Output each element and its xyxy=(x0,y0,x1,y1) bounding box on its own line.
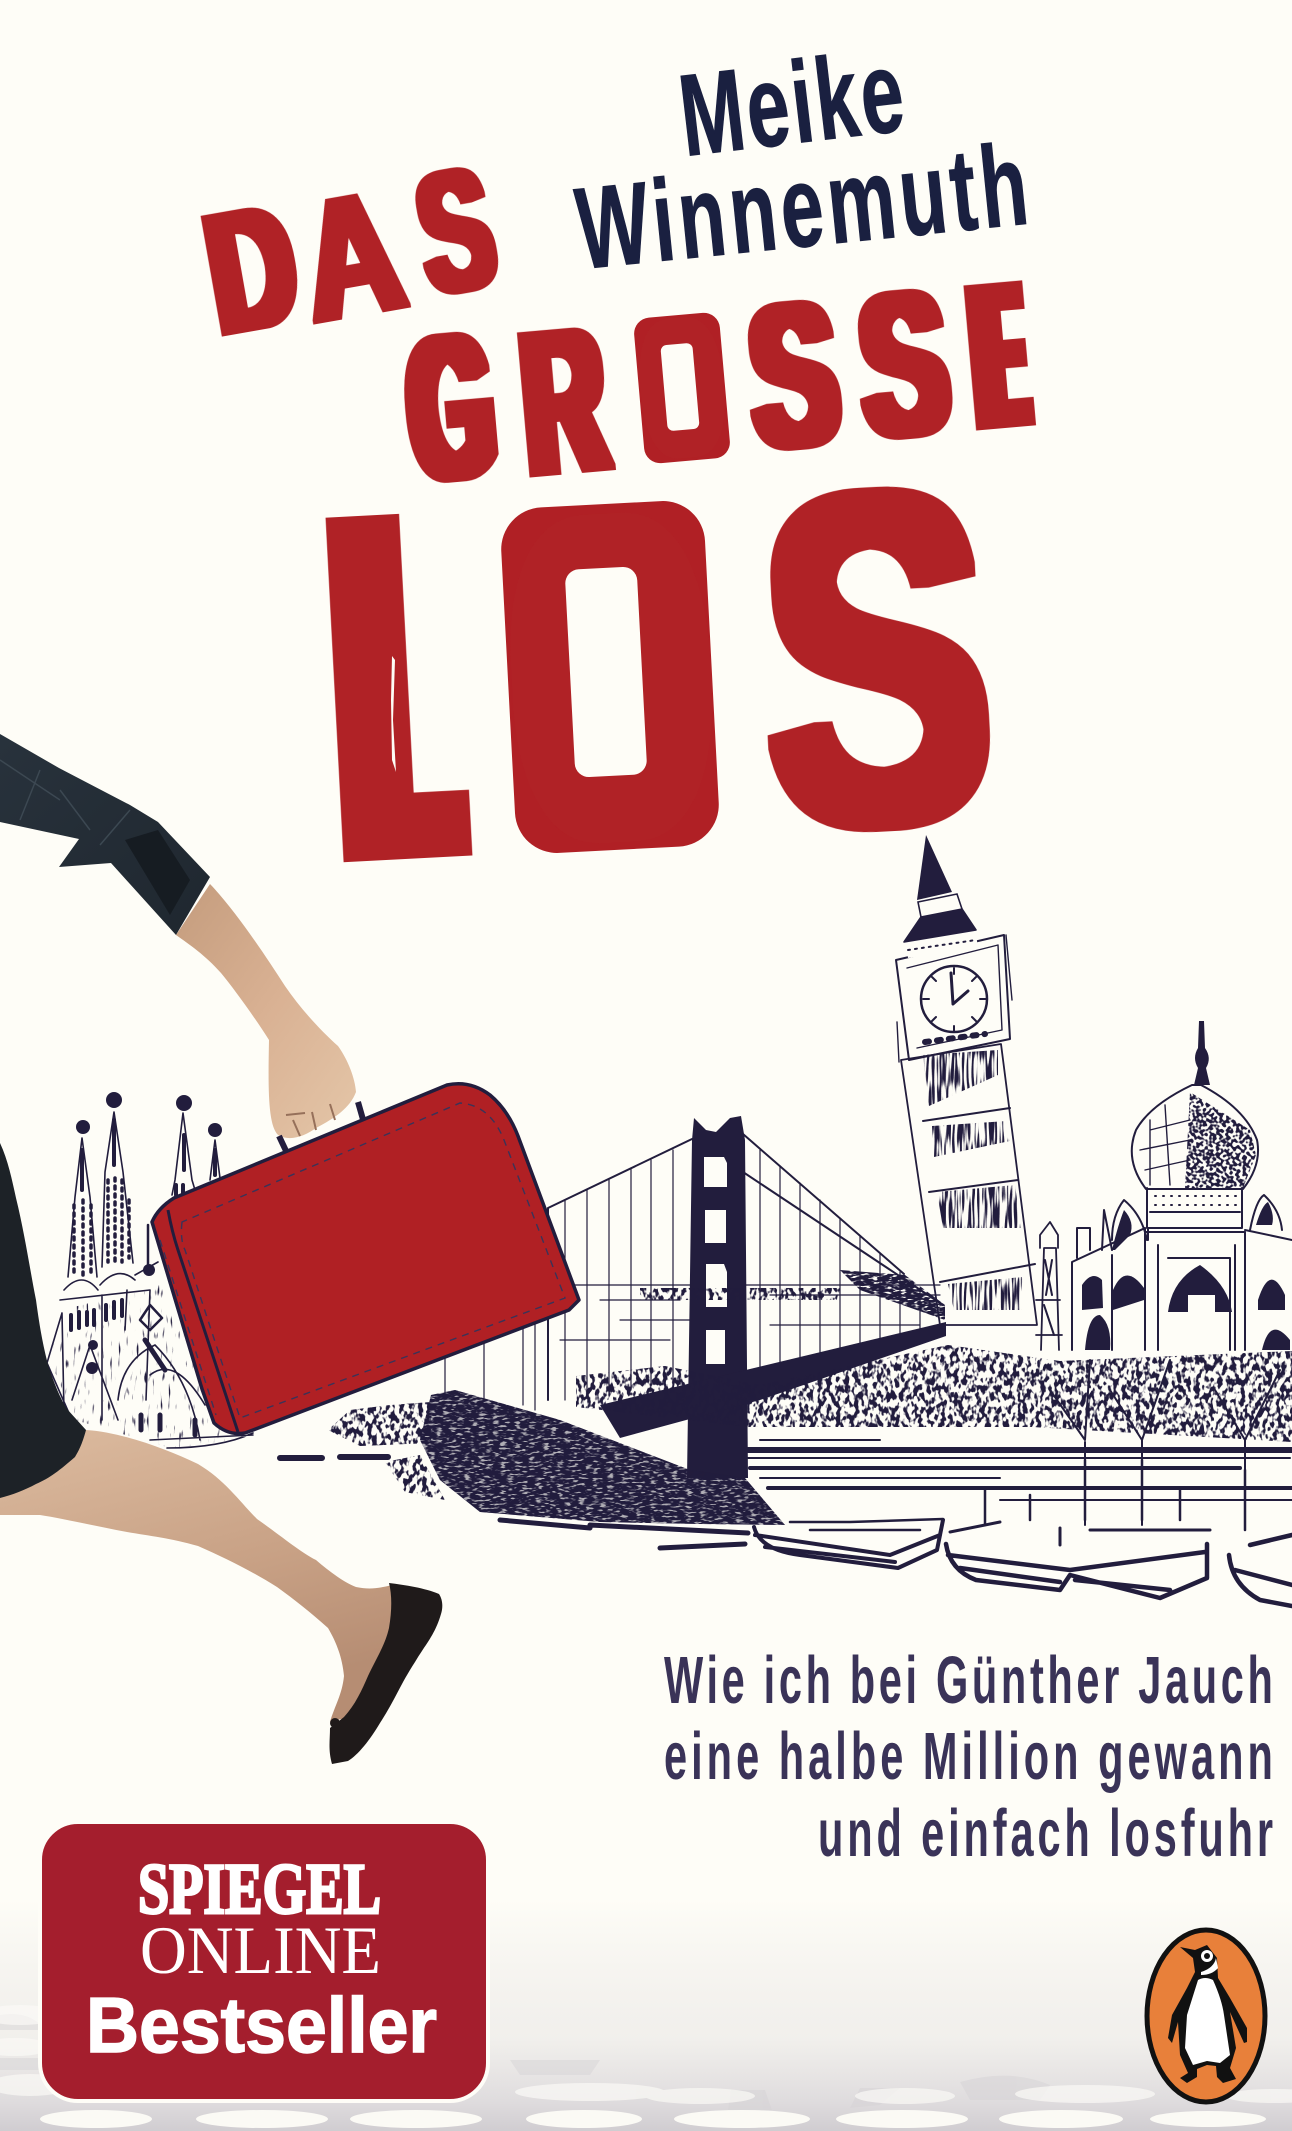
title: DAS GROSSE LOS xyxy=(194,132,1029,958)
sleeve xyxy=(0,734,210,935)
city sketch: Sagrada Familia xyxy=(47,1092,253,1448)
arm xyxy=(176,884,356,1138)
shoe xyxy=(330,1583,442,1764)
subtitle: eine halbe Million gewann xyxy=(664,1719,1273,1793)
title word: DAS: A xyxy=(288,154,416,359)
bestseller badge xyxy=(40,1822,488,2101)
title word: DAS: D xyxy=(194,168,310,370)
city sketch: river and boats xyxy=(748,1440,1292,1606)
boat 2 xyxy=(946,1522,1210,1598)
title word: GROSSE: R xyxy=(514,285,614,518)
handle xyxy=(279,1102,364,1153)
city sketch: Taj Mahal xyxy=(1036,1021,1292,1350)
city sketch: Big Ben xyxy=(896,835,1037,1325)
red suitcase xyxy=(152,1084,579,1434)
bestseller badge: SPIEGEL xyxy=(138,1849,381,1929)
boat 3 xyxy=(1229,1535,1292,1606)
title word: DAS xyxy=(194,132,508,370)
icon: penguin logo xyxy=(1147,1930,1265,2102)
author name: Winnemuth xyxy=(570,119,1033,294)
woman: arm and sleeve xyxy=(0,734,356,1138)
author name: Meike xyxy=(673,26,910,181)
hand shadow and ring xyxy=(286,1104,335,1136)
title word: DAS: S xyxy=(404,132,508,332)
leg xyxy=(0,1430,392,1722)
woman: skirt and leg xyxy=(0,1143,442,1764)
city sketch: scribbled shoreline xyxy=(280,1390,785,1548)
title word: GROSSE: S xyxy=(851,247,956,481)
letter O with squared plate and counter: O xyxy=(636,278,728,497)
boat 1 xyxy=(754,1519,943,1568)
title word: LOS xyxy=(336,392,1004,958)
bestseller badge: Bestseller xyxy=(86,1981,437,2069)
subtitle: Wie ich bei Günther Jauch xyxy=(664,1643,1273,1717)
author name xyxy=(570,26,1033,294)
subtitle xyxy=(664,1643,1273,1870)
title word: LOS: L xyxy=(336,414,456,958)
title word: GROSSE: E xyxy=(969,240,1029,470)
crack in letter L xyxy=(391,656,396,772)
letter O with squared plate and counter: O xyxy=(508,436,715,919)
skirt xyxy=(0,1143,86,1498)
bestseller badge: ONLINE xyxy=(140,1912,381,1988)
title word: GROSSE: S xyxy=(741,258,846,492)
city sketch: trees along the river xyxy=(576,1345,1292,1530)
cobblestone pavement xyxy=(0,1900,1292,2131)
city sketch: Golden Gate bridge xyxy=(445,1116,946,1478)
clock face xyxy=(921,966,987,1032)
title word: GROSSE: G xyxy=(400,292,502,524)
title word: GROSSE xyxy=(400,240,1029,524)
subtitle: und einfach losfuhr xyxy=(818,1796,1273,1870)
title word: LOS: S xyxy=(749,392,1004,925)
